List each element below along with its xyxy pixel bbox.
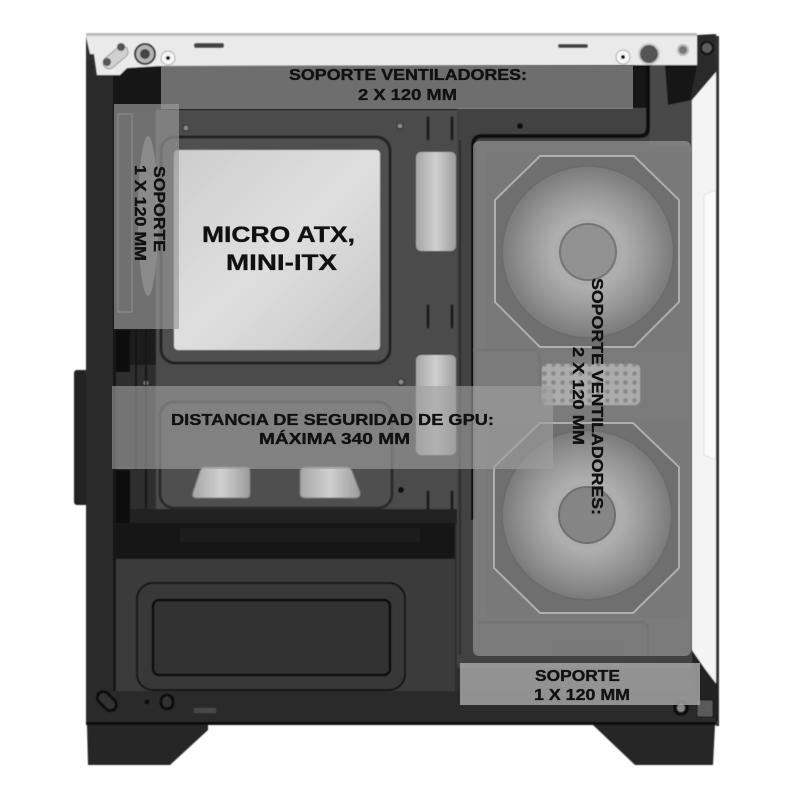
black band	[116, 523, 455, 559]
motherboard tray	[156, 110, 457, 509]
motherboard cutout	[174, 150, 380, 350]
label: motherboard compatibility: MINI-ITX	[226, 250, 337, 275]
right tray section	[457, 108, 692, 668]
label: motherboard compatibility	[202, 222, 355, 275]
top dark gap	[116, 65, 650, 111]
label: left fan support: SOPORTE	[150, 166, 167, 252]
overlay: top fans	[161, 66, 633, 109]
label: GPU clearance: MÁXIMA 340 MM	[259, 429, 410, 448]
lower motherboard frame	[160, 402, 392, 508]
label: bottom fan support: 1 X 120 MM	[534, 687, 630, 704]
lower fan rack	[473, 350, 540, 405]
label: right fan support	[569, 278, 605, 515]
icon: lower fan	[494, 423, 679, 613]
label: left fan support	[131, 165, 167, 261]
rail	[130, 509, 457, 524]
icon: upper fan	[495, 156, 679, 347]
label: GPU clearance: DISTANCIA DE SEGURIDAD DE GPU:	[171, 412, 494, 429]
screws	[143, 123, 411, 521]
label: GPU clearance	[171, 412, 494, 448]
left pillar	[86, 60, 115, 700]
right glass edge	[692, 72, 716, 685]
left side bump	[74, 370, 88, 505]
top right corner	[690, 34, 718, 100]
label: left fan support: 1 X 120 MM	[131, 165, 148, 261]
case photo	[74, 33, 719, 765]
label: bottom fan support: SOPORTE	[535, 668, 620, 685]
black cable line	[473, 65, 648, 520]
white top bar	[86, 36, 697, 75]
lower slots	[192, 467, 250, 498]
label: right fan support: SOPORTE VENTILADORES:	[588, 278, 605, 515]
case body	[86, 36, 718, 724]
upper right dark block	[665, 65, 718, 105]
label: top fan support: SOPORTE VENTILADORES:	[289, 67, 527, 84]
overlay: GPU clearance	[112, 386, 553, 469]
label: top fan support	[289, 67, 527, 104]
label: right fan support: 2 X 120 MM	[569, 347, 586, 445]
corner bracket	[95, 689, 119, 713]
lower right corner	[692, 652, 718, 722]
cable slots	[416, 152, 456, 251]
overlay: left fan	[114, 104, 179, 329]
upper left dark gap	[116, 65, 176, 365]
feet	[87, 725, 208, 765]
shroud outer recess	[137, 583, 405, 690]
label: top fan support: 2 X 120 MM	[358, 87, 457, 104]
label: motherboard compatibility: MICRO ATX,	[202, 222, 355, 247]
motherboard frame	[161, 137, 390, 363]
overlay: right fans with fan art	[473, 141, 691, 656]
shroud inner recess	[153, 600, 390, 675]
overlay: bottom fan	[460, 663, 700, 705]
fan frames	[486, 152, 688, 352]
label: bottom fan support	[534, 668, 630, 704]
PSU shroud	[116, 559, 455, 691]
bottom frame	[86, 691, 718, 722]
top bar screws	[101, 43, 688, 71]
vent	[542, 364, 640, 405]
cable area	[116, 330, 130, 525]
small tie slots	[428, 118, 452, 508]
